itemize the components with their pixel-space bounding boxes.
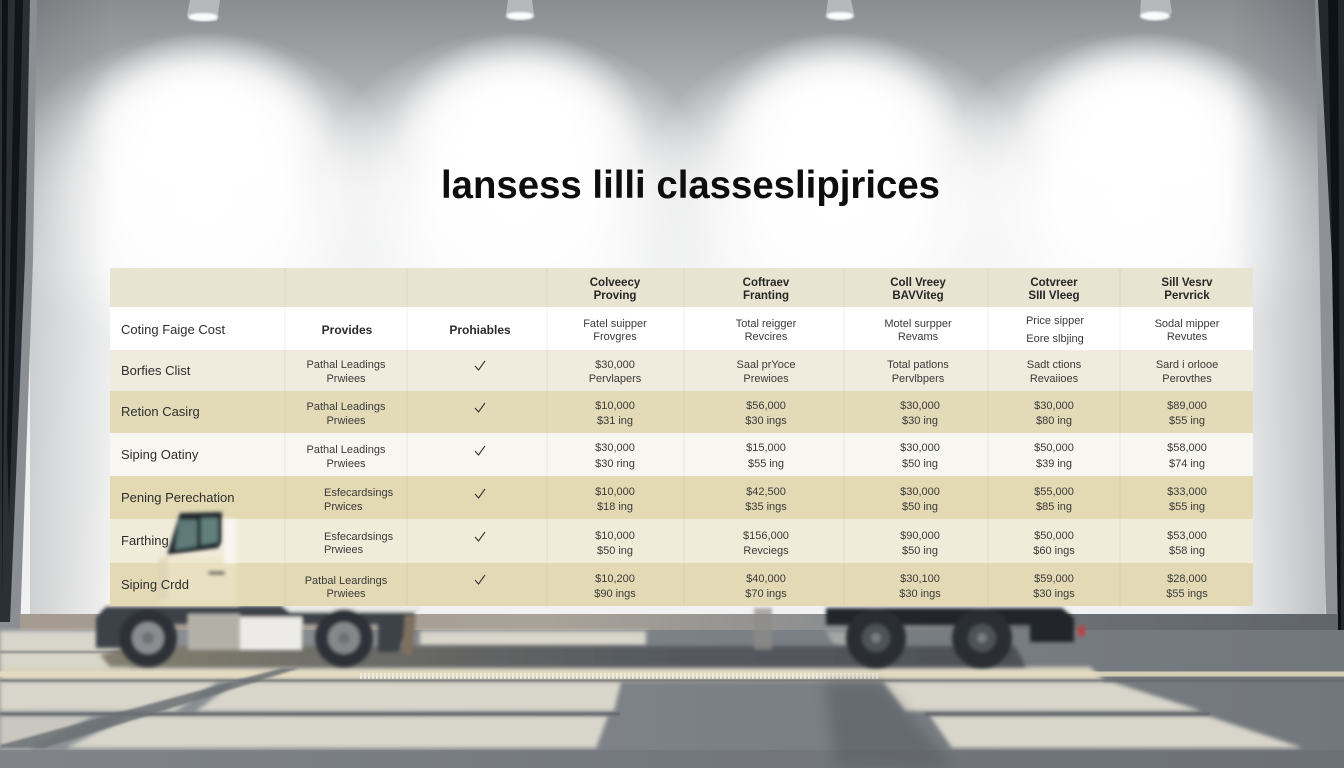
row: Coting Faige Cost: Eore slbjing	[1026, 333, 1084, 345]
row: Pening Perechation: $55,000	[1034, 486, 1074, 498]
row: Farthing: Prwiees	[324, 544, 364, 556]
row: Borfies Clist: Perovthes	[1162, 373, 1212, 385]
row: Retion Casirg	[121, 400, 1207, 427]
row: Pening Perechation: $30,000	[900, 486, 940, 498]
truck chassis	[96, 606, 1085, 655]
row: Siping Crdd: $55 ings	[1166, 588, 1208, 600]
central floor shadow	[825, 682, 955, 768]
row: Pening Perechation: $85 ing	[1036, 501, 1072, 513]
row: Borfies Clist: Pervlbpers	[892, 373, 945, 385]
row: Pening Perechation: $33,000	[1167, 486, 1207, 498]
row: Retion Casirg: $89,000	[1167, 400, 1207, 412]
row: Coting Faige Cost: Total reigger	[736, 318, 797, 330]
row: Borfies Clist: Total patlons	[887, 359, 949, 371]
row: Siping Crdd	[121, 573, 1208, 600]
row: Coting Faige Cost: Motel surpper	[884, 318, 952, 330]
header row: Sill Vesrv	[1161, 277, 1213, 289]
row: Coting Faige Cost: Frovgres	[593, 331, 637, 343]
truck cab showing through table	[158, 512, 236, 604]
row: Retion Casirg: Prwiees	[326, 415, 366, 427]
row: Coting Faige Cost: Revutes	[1167, 331, 1208, 343]
row: Borfies Clist: Sadt ctions	[1027, 359, 1082, 371]
row: Siping Oatiny: $15,000	[746, 442, 786, 454]
row: Siping Crdd: $70 ings	[745, 588, 787, 600]
spotlight 1	[187, 0, 220, 21]
row: Farthing: $50 ing	[597, 545, 633, 557]
row: Borfies Clist: Pathal Leadings	[307, 359, 386, 371]
row: Farthing	[121, 530, 1207, 557]
floor light patches	[0, 631, 1303, 748]
row: Retion Casirg: $30 ing	[902, 415, 938, 427]
row: Retion Casirg: $31 ing	[597, 415, 633, 427]
row: Siping Crdd: $59,000	[1034, 573, 1074, 585]
row: Pening Perechation: Prwices	[324, 501, 363, 513]
row: Farthing: $50,000	[1034, 530, 1074, 542]
spotlight 4	[1140, 0, 1172, 20]
header row: Coll Vreey	[890, 277, 946, 289]
row: Borfies Clist: $30,000	[595, 359, 635, 371]
row: Siping Crdd: $40,000	[746, 573, 786, 585]
row: Coting Faige Cost: Revcires	[745, 331, 788, 343]
row: Pening Perechation: $55 ing	[1169, 501, 1205, 513]
header row: Pervrick	[1164, 290, 1210, 302]
row: Pening Perechation: $35 ings	[745, 501, 787, 513]
floor	[0, 630, 1344, 768]
row: Coting Faige Cost: Coting Faige Cost	[121, 322, 225, 337]
right door frame	[1315, 0, 1344, 630]
row: Borfies Clist: Saal prYoce	[737, 359, 795, 371]
row: Farthing: Esfecardsings	[324, 531, 394, 543]
row: Retion Casirg: $56,000	[746, 400, 786, 412]
row: Retion Casirg: $10,000	[595, 400, 635, 412]
row: Retion Casirg: Retion Casirg	[121, 404, 200, 419]
row: Retion Casirg: $80 ing	[1036, 415, 1072, 427]
floor expansion strip	[0, 672, 1344, 676]
wall base band	[20, 614, 1338, 631]
header row	[590, 277, 1213, 302]
row: Siping Crdd: Siping Crdd	[121, 577, 189, 592]
row: Siping Crdd: $90 ings	[594, 588, 636, 600]
row: Siping Crdd: Patbal Leardings	[305, 575, 388, 587]
row: Borfies Clist	[121, 359, 1218, 385]
row: Pening Perechation: $18 ing	[597, 501, 633, 513]
row: Coting Faige Cost: Prohiables	[449, 323, 511, 337]
header row: Franting	[743, 290, 789, 302]
row: Borfies Clist: Prwiees	[326, 373, 366, 385]
spotlight 2	[506, 0, 534, 20]
row: Siping Oatiny: $55 ing	[748, 458, 784, 470]
under-truck shadow	[100, 646, 1026, 667]
row: Pening Perechation: Pening Perechation	[121, 490, 234, 505]
row: Coting Faige Cost	[121, 315, 1220, 345]
row: Retion Casirg: Pathal Leadings	[307, 401, 386, 413]
row: Farthing: $50 ing	[902, 545, 938, 557]
row: Siping Oatiny: $30 ring	[595, 458, 635, 470]
row: Siping Oatiny: Prwiees	[326, 458, 366, 470]
row: Siping Oatiny: $30,000	[900, 442, 940, 454]
bottom floor shadow	[0, 750, 1344, 768]
header row: Coftraev	[743, 277, 790, 289]
row: Siping Crdd: $30 ings	[1033, 588, 1075, 600]
row: Farthing: $90,000	[900, 530, 940, 542]
row: Borfies Clist: Borfies Clist	[121, 363, 191, 378]
pricing table	[110, 268, 1253, 606]
row: Pening Perechation: $42,500	[746, 486, 786, 498]
row: Siping Oatiny: Pathal Leadings	[307, 444, 386, 456]
row: Coting Faige Cost: Fatel suipper	[583, 318, 647, 330]
floor seams	[0, 652, 1344, 714]
row: Siping Oatiny	[121, 442, 1207, 470]
spotlight 3	[826, 0, 854, 20]
title: lansess lilli classeslipjrices	[441, 164, 940, 207]
truck wheels	[119, 608, 1012, 668]
row: Siping Oatiny: $74 ing	[1169, 458, 1205, 470]
row: Farthing: $58 ing	[1169, 545, 1205, 557]
row: Siping Crdd: $28,000	[1167, 573, 1207, 585]
row: Farthing: $53,000	[1167, 530, 1207, 542]
header row: Colveecy	[590, 277, 641, 289]
row: Farthing: $10,000	[595, 530, 635, 542]
row: Farthing: $156,000	[743, 530, 789, 542]
row: Siping Crdd: $30,100	[900, 573, 940, 585]
row: Coting Faige Cost: Price sipper	[1026, 315, 1084, 327]
truck cab lower body	[104, 560, 238, 608]
row: Coting Faige Cost: Provides	[322, 323, 373, 337]
row: Pening Perechation	[121, 486, 1207, 513]
row: Siping Crdd: Prwiees	[326, 588, 366, 600]
row: Pening Perechation: $10,000	[595, 486, 635, 498]
ceiling spotlights	[187, 0, 1172, 21]
row: Borfies Clist: Revaiioes	[1030, 373, 1079, 385]
row backgrounds	[110, 268, 1253, 606]
row: Siping Oatiny: $50 ing	[902, 458, 938, 470]
row: Siping Oatiny: Siping Oatiny	[121, 447, 199, 462]
row: Siping Crdd: $30 ings	[899, 588, 941, 600]
row: Coting Faige Cost: Sodal mipper	[1155, 318, 1220, 330]
row: Pening Perechation: $50 ing	[902, 501, 938, 513]
row: Retion Casirg: $30 ings	[745, 415, 787, 427]
row: Borfies Clist: Sard i orlooe	[1156, 359, 1218, 371]
row: Siping Oatiny: $30,000	[595, 442, 635, 454]
row: Siping Oatiny: $50,000	[1034, 442, 1074, 454]
row: Retion Casirg: $30,000	[900, 400, 940, 412]
row: Farthing: $60 ings	[1033, 545, 1075, 557]
row: Pening Perechation: Esfecardsings	[324, 487, 394, 499]
left door frame	[0, 0, 37, 631]
row: Farthing: Farthing	[121, 533, 169, 548]
header row: SIII Vleeg	[1028, 290, 1080, 302]
header row: Proving	[594, 290, 636, 302]
row: Coting Faige Cost: Revams	[898, 331, 939, 343]
row: Retion Casirg: $55 ing	[1169, 415, 1205, 427]
row: Siping Oatiny: $39 ing	[1036, 458, 1072, 470]
header row: Cotvreer	[1030, 277, 1078, 289]
row: Siping Oatiny: $58,000	[1167, 442, 1207, 454]
row: Farthing: Revciegs	[743, 545, 789, 557]
row: Siping Crdd: $10,200	[595, 573, 635, 585]
row: Retion Casirg: $30,000	[1034, 400, 1074, 412]
row: Borfies Clist: Pervlapers	[589, 373, 642, 385]
diagonal floor shadow	[0, 668, 300, 748]
header row: BAVViteg	[892, 290, 944, 302]
truck	[96, 560, 1085, 668]
row: Borfies Clist: Prewioes	[743, 373, 789, 385]
